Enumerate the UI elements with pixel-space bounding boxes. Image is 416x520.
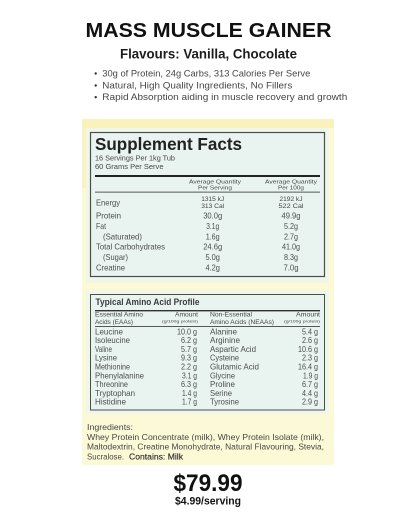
non-essential amino acids: 6.7 g: [302, 379, 318, 389]
nutrition rows: Energy: [96, 198, 121, 208]
column headers: [189, 180, 317, 192]
non-essential amino acids: Glycine: [210, 370, 235, 380]
column headers: Per 100g: [278, 186, 304, 192]
non-essential amino acids: 10.6 g: [298, 344, 318, 354]
essential amino acids: 10.0 g: [177, 326, 197, 336]
table headers: Amino Acids (NEAAs): [210, 319, 274, 326]
non-essential amino acids: [210, 326, 318, 407]
benefits list: Rapid Absorption aiding in muscle recovery and growth: [102, 92, 347, 103]
essential amino acids: Isoleucine: [95, 335, 130, 345]
essential amino acids: Valine: [95, 344, 112, 354]
non-essential amino acids: Glutamic Acid: [210, 362, 259, 372]
column headers: Average Quantity: [189, 180, 241, 186]
non-essential amino acids: Aspartic Acid: [210, 344, 256, 354]
nutrition rows: 313 Cal: [201, 203, 225, 210]
essential amino acids: [95, 326, 197, 407]
nutrition rows: 3.1g: [206, 221, 219, 231]
title: MASS MUSCLE GAINER: [86, 20, 332, 42]
nutrition rows: (Saturated): [103, 231, 142, 241]
essential amino acids: 6.3 g: [181, 379, 197, 389]
serving info: 16 Servings Per 1kg Tub: [95, 154, 175, 162]
nutrition rows: [96, 196, 304, 273]
essential amino acids: Threonine: [95, 379, 128, 389]
non-essential amino acids: 5.4 g: [302, 326, 318, 336]
non-essential amino acids: Proline: [210, 379, 235, 389]
heading: amino acid profile: Typical Amino Acid Profile: [96, 297, 200, 307]
essential amino acids: Methionine: [95, 362, 130, 372]
nutrition rows: 2.7g: [284, 231, 298, 241]
nutrition rows: 30.0g: [203, 211, 223, 221]
ingredients: Ingredients:: [87, 422, 133, 432]
table headers: (g/100g protein): [162, 320, 199, 324]
table headers: [95, 312, 321, 326]
nutrition rows: 41.0g: [282, 242, 300, 252]
non-essential amino acids: Tyrosine: [210, 397, 239, 407]
table headers: Acids (EAAs): [95, 319, 133, 326]
essential amino acids: 2.2 g: [181, 362, 197, 372]
essential amino acids: 9.3 g: [181, 353, 197, 363]
essential amino acids: Leucine: [95, 326, 123, 336]
ingredients: Contains: Milk: [129, 451, 184, 461]
nutrition rows: 8.3g: [284, 252, 298, 262]
serving info: [95, 154, 175, 171]
table headers: (g/100g protein): [284, 320, 321, 324]
essential amino acids: 1.7 g: [182, 397, 197, 407]
non-essential amino acids: 2.9 g: [302, 397, 318, 407]
table headers: Non-Essential: [210, 312, 252, 319]
non-essential amino acids: 1.9 g: [303, 370, 318, 380]
non-essential amino acids: 16.4 g: [298, 362, 318, 372]
nutrition rows: 522 Cal: [278, 203, 304, 210]
price: $79.99: [174, 470, 242, 497]
essential amino acids: 1.4 g: [182, 388, 197, 398]
ingredients: [87, 422, 324, 461]
nutrition rows: Total Carbohydrates: [96, 242, 165, 252]
essential amino acids: Phenylalanine: [95, 370, 144, 380]
benefits list: Natural, High Quality Ingredients, No Fillers: [102, 80, 292, 91]
non-essential amino acids: Arginine: [210, 335, 240, 345]
table headers: Amount: [175, 312, 198, 319]
panel: supplement facts: [90, 132, 324, 276]
essential amino acids: 6.2 g: [181, 335, 197, 345]
essential amino acids: 5.7 g: [181, 344, 197, 354]
non-essential amino acids: 2.6 g: [302, 335, 318, 345]
nutrition rows: Creatine: [96, 263, 125, 273]
nutrition rows: Protein: [96, 211, 121, 221]
nutrition rows: 5.0g: [205, 252, 220, 262]
nutrition rows: 1.6g: [206, 231, 220, 241]
benefits list: 30g of Protein, 24g Carbs, 313 Calories Per Serve: [102, 68, 310, 79]
nutrition rows: 2192 kJ: [280, 196, 302, 203]
nutrition rows: Fat: [96, 221, 107, 231]
nutrition rows: (Sugar): [103, 252, 128, 262]
non-essential amino acids: 2.3 g: [302, 353, 318, 363]
essential amino acids: 3.1 g: [182, 370, 197, 380]
benefits list: [94, 68, 347, 103]
ingredients: Sucralose.: [87, 451, 124, 461]
table headers: Amount: [296, 312, 320, 319]
serving info: 60 Grams Per Serve: [95, 162, 164, 171]
column headers: Per Serving: [198, 186, 232, 192]
essential amino acids: Histidine: [95, 397, 126, 407]
essential amino acids: Lysine: [95, 353, 117, 363]
nutrition rows: 49.9g: [282, 211, 301, 221]
subtitle: flavours: Flavours: Vanilla, Chocolate: [120, 46, 297, 62]
ingredients: Maltodextrin, Creatine Monohydrate, Natural Flavouring, Stevia,: [87, 442, 324, 452]
non-essential amino acids: 4.4 g: [302, 388, 318, 398]
ingredients: Whey Protein Concentrate (milk), Whey Protein Isolate (milk),: [87, 432, 324, 442]
price per serving: $4.99/serving: [175, 496, 241, 508]
nutrition rows: 24.6g: [203, 242, 223, 252]
nutrition rows: 7.0g: [284, 263, 299, 273]
essential amino acids: Tryptophan: [95, 388, 135, 398]
column headers: Average Quantity: [265, 180, 317, 186]
table headers: Essential Amino: [95, 312, 144, 319]
nutrition rows: 1315 kJ: [201, 196, 224, 203]
heading: supplement facts: Supplement Facts: [95, 134, 242, 154]
non-essential amino acids: Cysteine: [210, 353, 239, 363]
non-essential amino acids: Serine: [210, 388, 232, 398]
non-essential amino acids: Alanine: [210, 326, 237, 336]
nutrition rows: 4.2g: [205, 263, 220, 273]
panel: amino acid profile: [90, 294, 324, 410]
nutrition rows: 5.2g: [284, 221, 298, 231]
panel: label background: [82, 119, 334, 465]
